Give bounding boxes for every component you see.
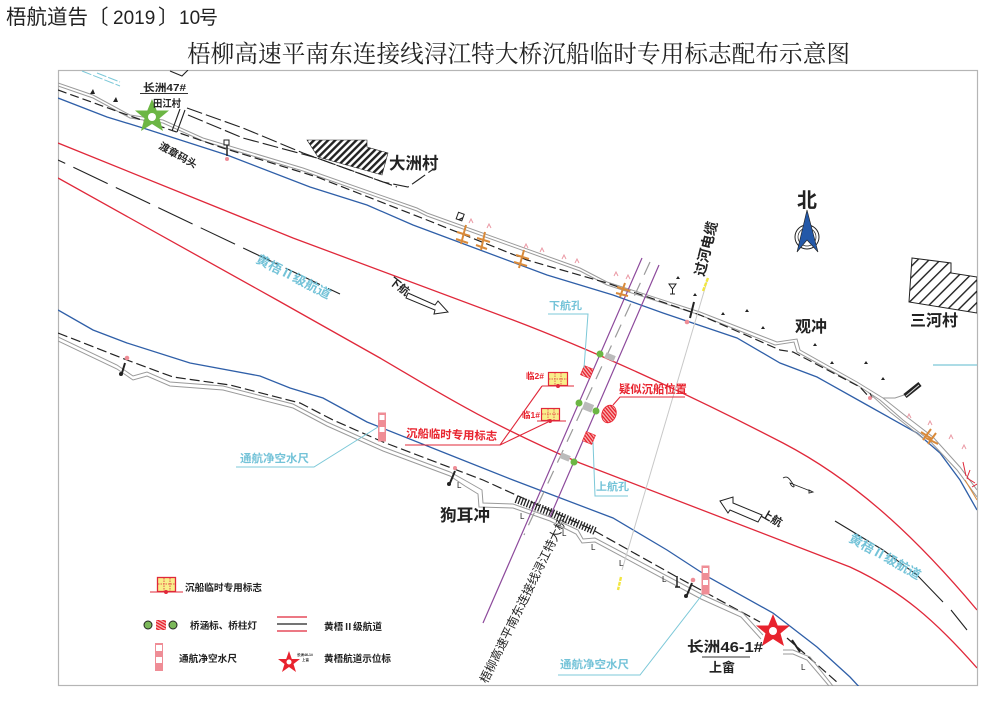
orange right edge line [965, 480, 977, 500]
black pier [905, 384, 920, 396]
notice number: 〕 [158, 6, 178, 29]
small bridge mark [170, 70, 188, 132]
north arrow: 北 [797, 189, 817, 212]
green locator star [135, 99, 169, 131]
L marks: L [801, 663, 806, 672]
lower shore dashed line [58, 333, 838, 683]
label: Changzhou 46-1: 长洲46-1# [687, 639, 763, 656]
water gauge right: 通航净空水尺 [560, 657, 629, 671]
suspected sunken ship: 疑似沉船位置 [619, 382, 687, 396]
bridge deck lines [483, 258, 659, 623]
legend: bridge marks [144, 620, 257, 632]
legend: temporary sign [150, 578, 262, 594]
label: Changzhou 47: 田江村 [153, 97, 181, 110]
notice number: 10 [179, 8, 200, 29]
label: Changzhou 47: 长洲47# [143, 81, 186, 94]
wine glass symbol [669, 284, 676, 294]
bridge pier lights and marks [559, 350, 616, 466]
legend: bridge marks: 桥涵标、桥柱灯 [190, 620, 257, 632]
water gauge left: 通航净空水尺 [240, 451, 309, 465]
temporary sign callout [405, 386, 548, 445]
L marks: L [591, 543, 596, 552]
L marks: L [619, 559, 624, 568]
L marks: L [562, 529, 567, 538]
teal creek lines [82, 71, 977, 365]
upstream arrow and label [720, 497, 785, 530]
legend: locator star: 长洲46-1# [297, 652, 313, 657]
legend: locator star [278, 651, 391, 672]
orange culverts [456, 225, 938, 444]
temporary sign No.2: 临2# [526, 371, 544, 381]
upper road dashes [187, 108, 432, 187]
legend [144, 578, 391, 672]
legend: locator star: 黄梧航道示位标 [324, 653, 391, 665]
downstream arrow and label [387, 274, 448, 314]
upstream arrow and label: 上航 [759, 506, 785, 530]
map panel frame [58, 70, 978, 686]
water gauge left [236, 413, 386, 467]
legend: water gauge: 通航净空水尺 [179, 653, 237, 665]
upstream span label: 上航孔 [596, 480, 630, 493]
legend: water gauge [155, 643, 237, 671]
legend: channel lines: 黄梧Ⅱ级航道 [324, 621, 382, 633]
label: Sanhe village: 三河村 [910, 311, 958, 330]
riverbank revetment hatching [516, 499, 595, 531]
title: 梧柳高速平南东连接线浔江特大桥沉船临时专用标志配布示意图 [187, 41, 850, 68]
L marks: L [457, 481, 462, 490]
legend: channel lines [277, 617, 382, 633]
label: bridge name: 梧柳高速平南东连接线浔江特大桥 [476, 515, 569, 685]
label: cross river cable: 过河电缆 [691, 220, 720, 278]
water gauge right [558, 566, 709, 675]
label: channel grade lower right: 黄梧Ⅱ级航道 [847, 531, 924, 583]
downstream arrow and label: 下航 [387, 274, 413, 299]
notice number: 〔 [88, 6, 108, 29]
shore symbols [90, 89, 885, 380]
label: Changzhou 47 [140, 81, 188, 110]
notice number: 梧航道告 [6, 6, 88, 29]
temporary sign No.1 [522, 408, 566, 423]
flow direction squiggle [783, 477, 813, 493]
temporary sign No.2 [526, 371, 574, 388]
lower shore road [58, 337, 833, 686]
downstream span label [548, 299, 588, 368]
upstream span label [593, 442, 630, 496]
red locator star [756, 614, 790, 646]
label: Gou'erchong: 狗耳冲 [440, 506, 490, 525]
village hatch: Sanhe [909, 258, 977, 313]
L marks [457, 481, 806, 672]
L marks: L [520, 512, 525, 521]
legend: temporary sign: 沉船临时专用标志 [185, 582, 262, 594]
label: Changzhou 46-1: 上畲 [709, 660, 735, 675]
temporary sign callout: 沉船临时专用标志 [406, 426, 497, 443]
village hatch: Dazhou [307, 140, 388, 175]
river gauges and beacons [119, 140, 872, 652]
north arrow [795, 189, 819, 252]
label: channel grade upper left: 黄梧Ⅱ级航道 [254, 251, 334, 302]
suspected sunken ship [599, 382, 687, 425]
upper navigation channel boundary [58, 143, 977, 610]
label: Dazhou village: 大洲村 [389, 154, 439, 173]
upper shore dashed line [58, 90, 870, 398]
label: Changzhou 46-1 [687, 639, 763, 675]
channel centre line [58, 160, 967, 630]
label: wharf: 渡章码头 [157, 139, 200, 171]
legend: locator star: 上畲 [302, 657, 310, 662]
notice number: 号 [199, 8, 218, 29]
notice number: 2019 [113, 8, 155, 29]
upper shore road [58, 83, 977, 497]
cross river cable [618, 278, 708, 590]
downstream span label: 下航孔 [549, 299, 583, 312]
upper river bank [58, 98, 977, 510]
temporary sign No.1: 临1# [522, 410, 540, 420]
label: Guanchong: 观冲 [795, 318, 827, 336]
lower river bank [58, 310, 862, 690]
lower navigation channel boundary [58, 178, 977, 668]
red end ticks [963, 462, 977, 487]
pink tick marks [469, 219, 966, 449]
L marks: L [662, 575, 667, 584]
